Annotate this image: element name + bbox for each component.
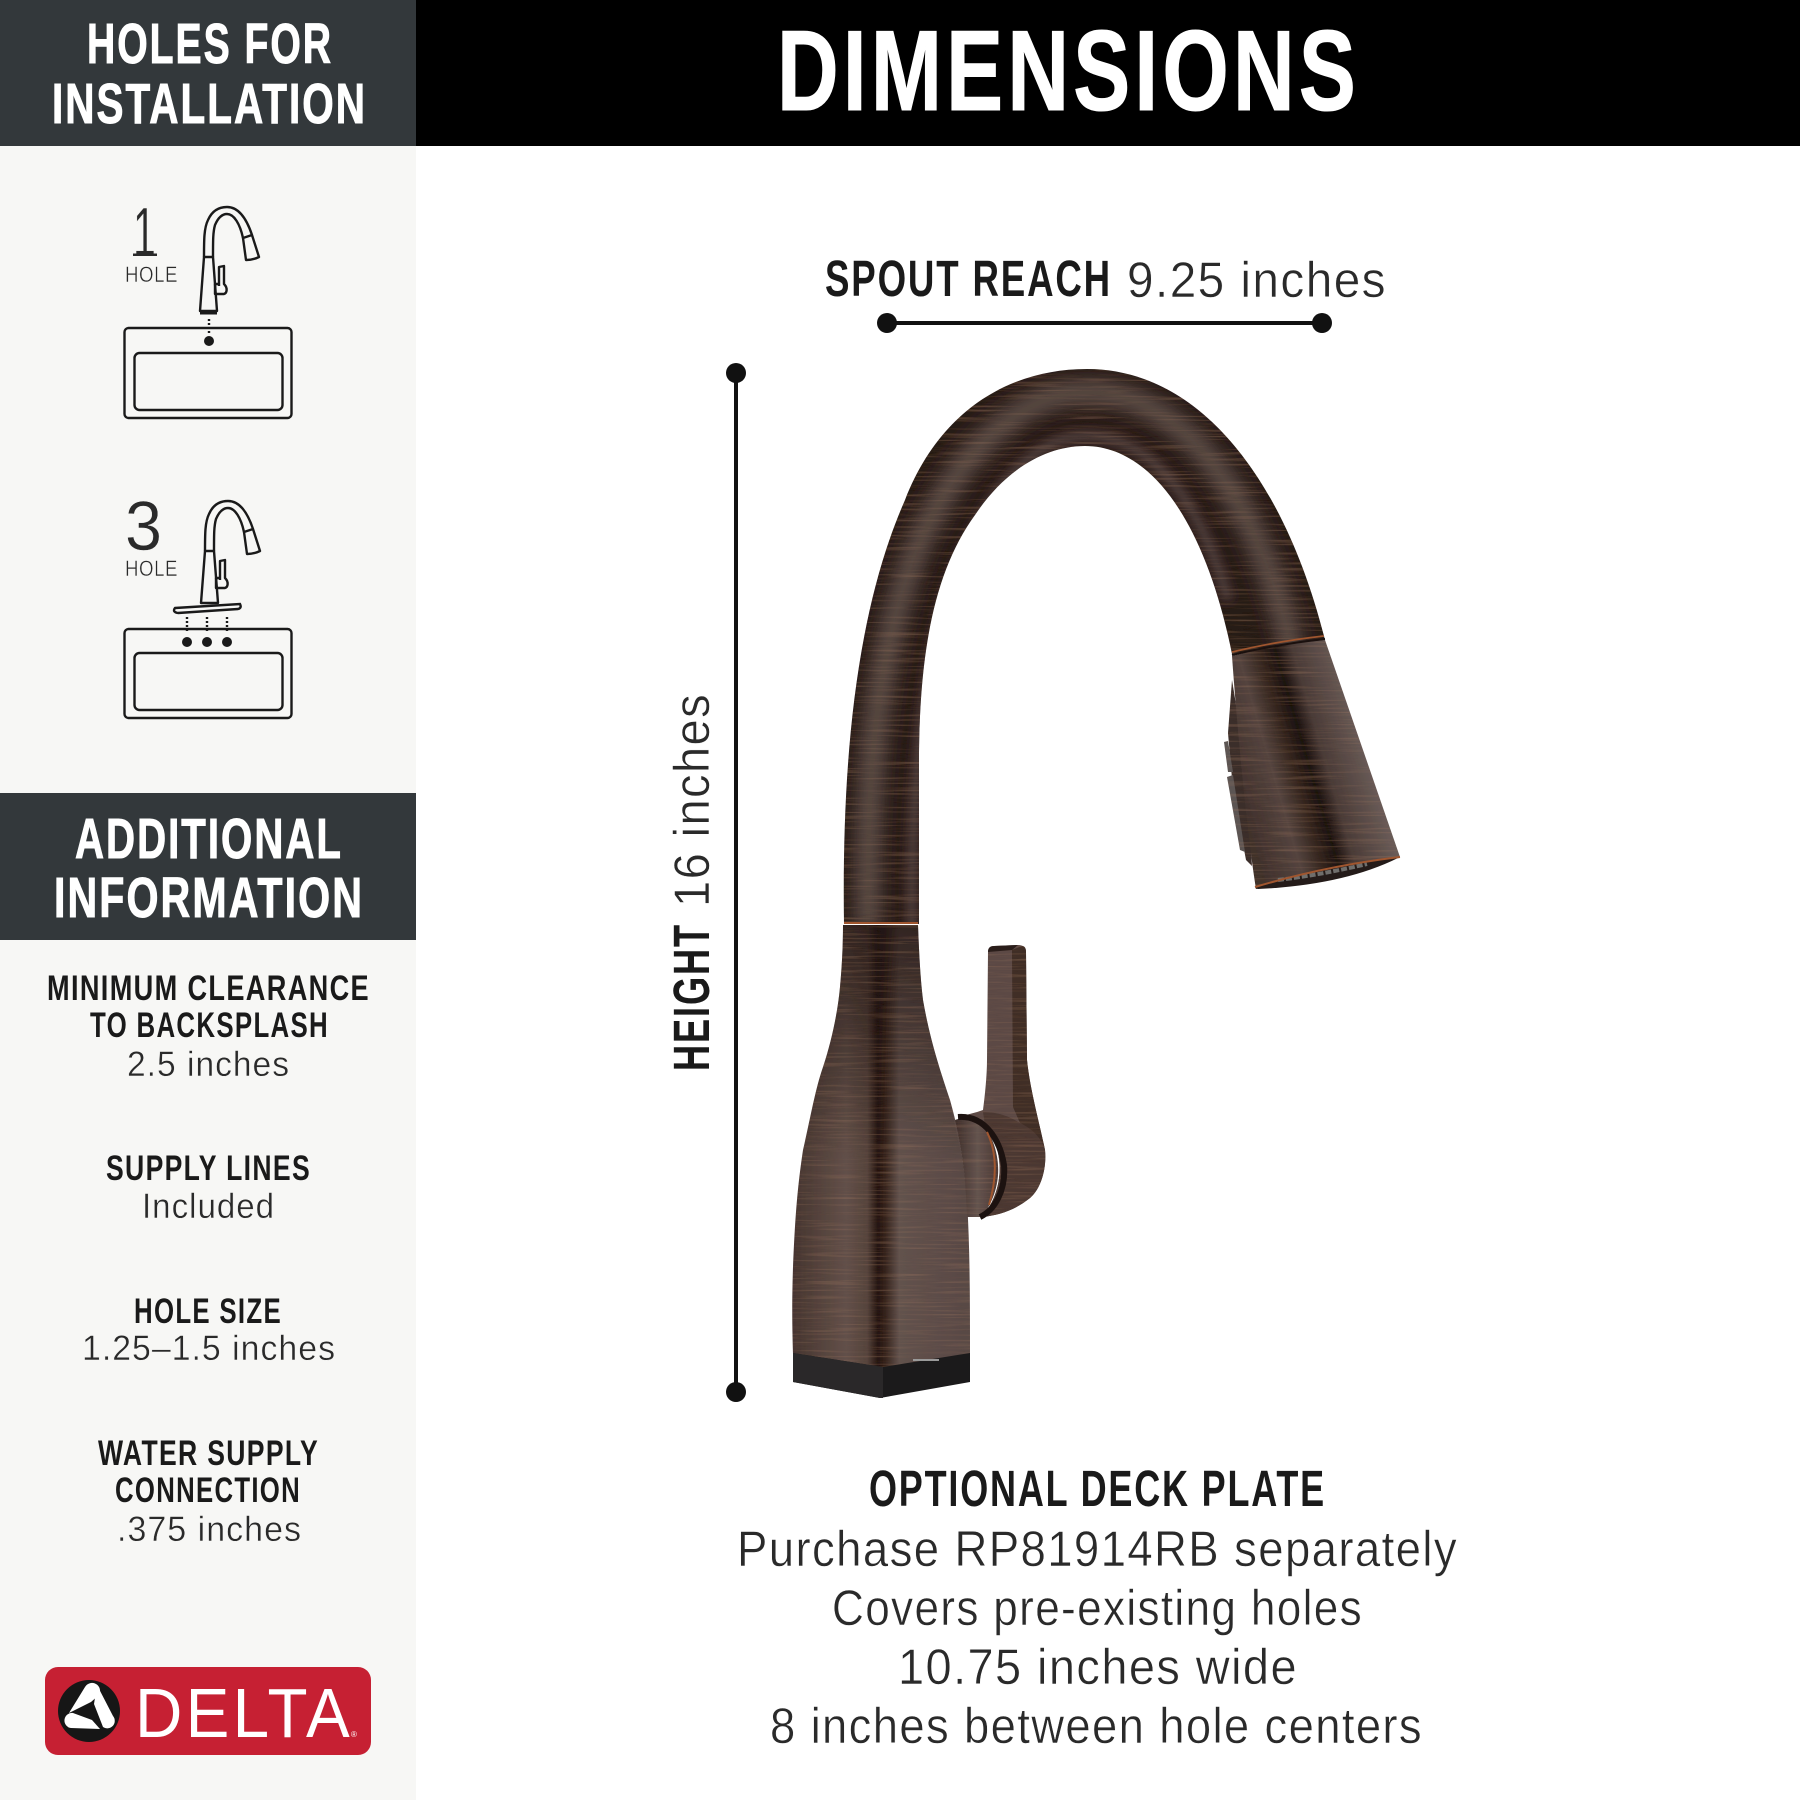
label: height bbox=[663, 693, 720, 1071]
logo: delta: DELTA bbox=[135, 1674, 353, 1752]
logo: delta: ® bbox=[351, 1730, 357, 1739]
text block: minimum clearance: 2.5 inches bbox=[127, 1045, 290, 1084]
title banner: dimensions bbox=[416, 0, 1800, 146]
text block: optional deck plate: OPTIONAL DECK PLATE bbox=[869, 1460, 1326, 1517]
label: height: 16 inches bbox=[664, 693, 720, 907]
text block: minimum clearance: MINIMUM CLEARANCE bbox=[47, 969, 370, 1008]
heading banner: additional information bbox=[0, 793, 416, 940]
base black foot bbox=[793, 1353, 970, 1398]
arrow: height dimension line bbox=[726, 363, 746, 1402]
label: spout reach bbox=[825, 250, 1387, 308]
pull-down head buttons bbox=[1224, 680, 1252, 866]
text block: hole size bbox=[82, 1292, 336, 1368]
heading banner: holes for installation: HOLES FOR bbox=[87, 12, 333, 76]
text block: minimum clearance bbox=[47, 969, 370, 1084]
heading banner: additional information: INFORMATION bbox=[54, 866, 364, 930]
icon: one hole installation: HOLE bbox=[125, 262, 178, 287]
lever details bbox=[958, 945, 1018, 1217]
text block: water supply connection: CONNECTION bbox=[115, 1471, 301, 1510]
base body bbox=[792, 925, 970, 1368]
pull-down head bbox=[1232, 640, 1400, 889]
text block: optional deck plate: 8 inches between hole centers bbox=[770, 1698, 1423, 1754]
text block: optional deck plate: 10.75 inches wide bbox=[898, 1639, 1298, 1695]
text block: supply lines bbox=[106, 1149, 311, 1226]
panel: left sidebar bbox=[0, 0, 416, 1800]
arrow: spout reach dimension line bbox=[877, 313, 1332, 333]
logo: delta bbox=[45, 1667, 371, 1755]
text block: optional deck plate: Covers pre-existing holes bbox=[832, 1580, 1363, 1636]
heading banner: additional information: ADDITIONAL bbox=[75, 807, 343, 871]
icon: three hole installation bbox=[124, 487, 292, 718]
text block: hole size: 1.25–1.5 inches bbox=[82, 1329, 336, 1368]
icon: one hole installation bbox=[124, 193, 292, 418]
icon: three hole installation: 3 bbox=[125, 487, 164, 565]
icon: three hole installation: HOLE bbox=[125, 556, 178, 581]
label: spout reach: 9.25 inches bbox=[1127, 252, 1387, 308]
text block: hole size: HOLE SIZE bbox=[134, 1292, 282, 1331]
head seam bbox=[844, 636, 1325, 923]
text block: water supply connection: .375 inches bbox=[117, 1510, 302, 1549]
product image: faucet bbox=[792, 369, 1400, 1398]
text block: supply lines: SUPPLY LINES bbox=[106, 1149, 311, 1188]
heading banner: holes for installation bbox=[0, 0, 416, 146]
heading banner: holes for installation: INSTALLATION bbox=[52, 72, 367, 136]
text block: supply lines: Included bbox=[142, 1187, 275, 1226]
text block: optional deck plate: Purchase RP81914RB separately bbox=[737, 1521, 1458, 1577]
text block: optional deck plate bbox=[737, 1460, 1458, 1754]
label: spout reach: SPOUT REACH bbox=[825, 250, 1112, 307]
handle lever bbox=[960, 945, 1045, 1217]
text block: minimum clearance: TO BACKSPLASH bbox=[90, 1006, 329, 1045]
text block: water supply connection: WATER SUPPLY bbox=[98, 1434, 319, 1473]
text block: water supply connection bbox=[98, 1434, 319, 1549]
spout bbox=[844, 369, 1325, 930]
label: height: HEIGHT bbox=[663, 923, 720, 1071]
icon: one hole installation: 1 bbox=[133, 193, 157, 271]
handle stem bbox=[955, 1118, 998, 1217]
title banner: dimensions: DIMENSIONS bbox=[777, 8, 1360, 135]
nozzle bbox=[1255, 857, 1400, 889]
